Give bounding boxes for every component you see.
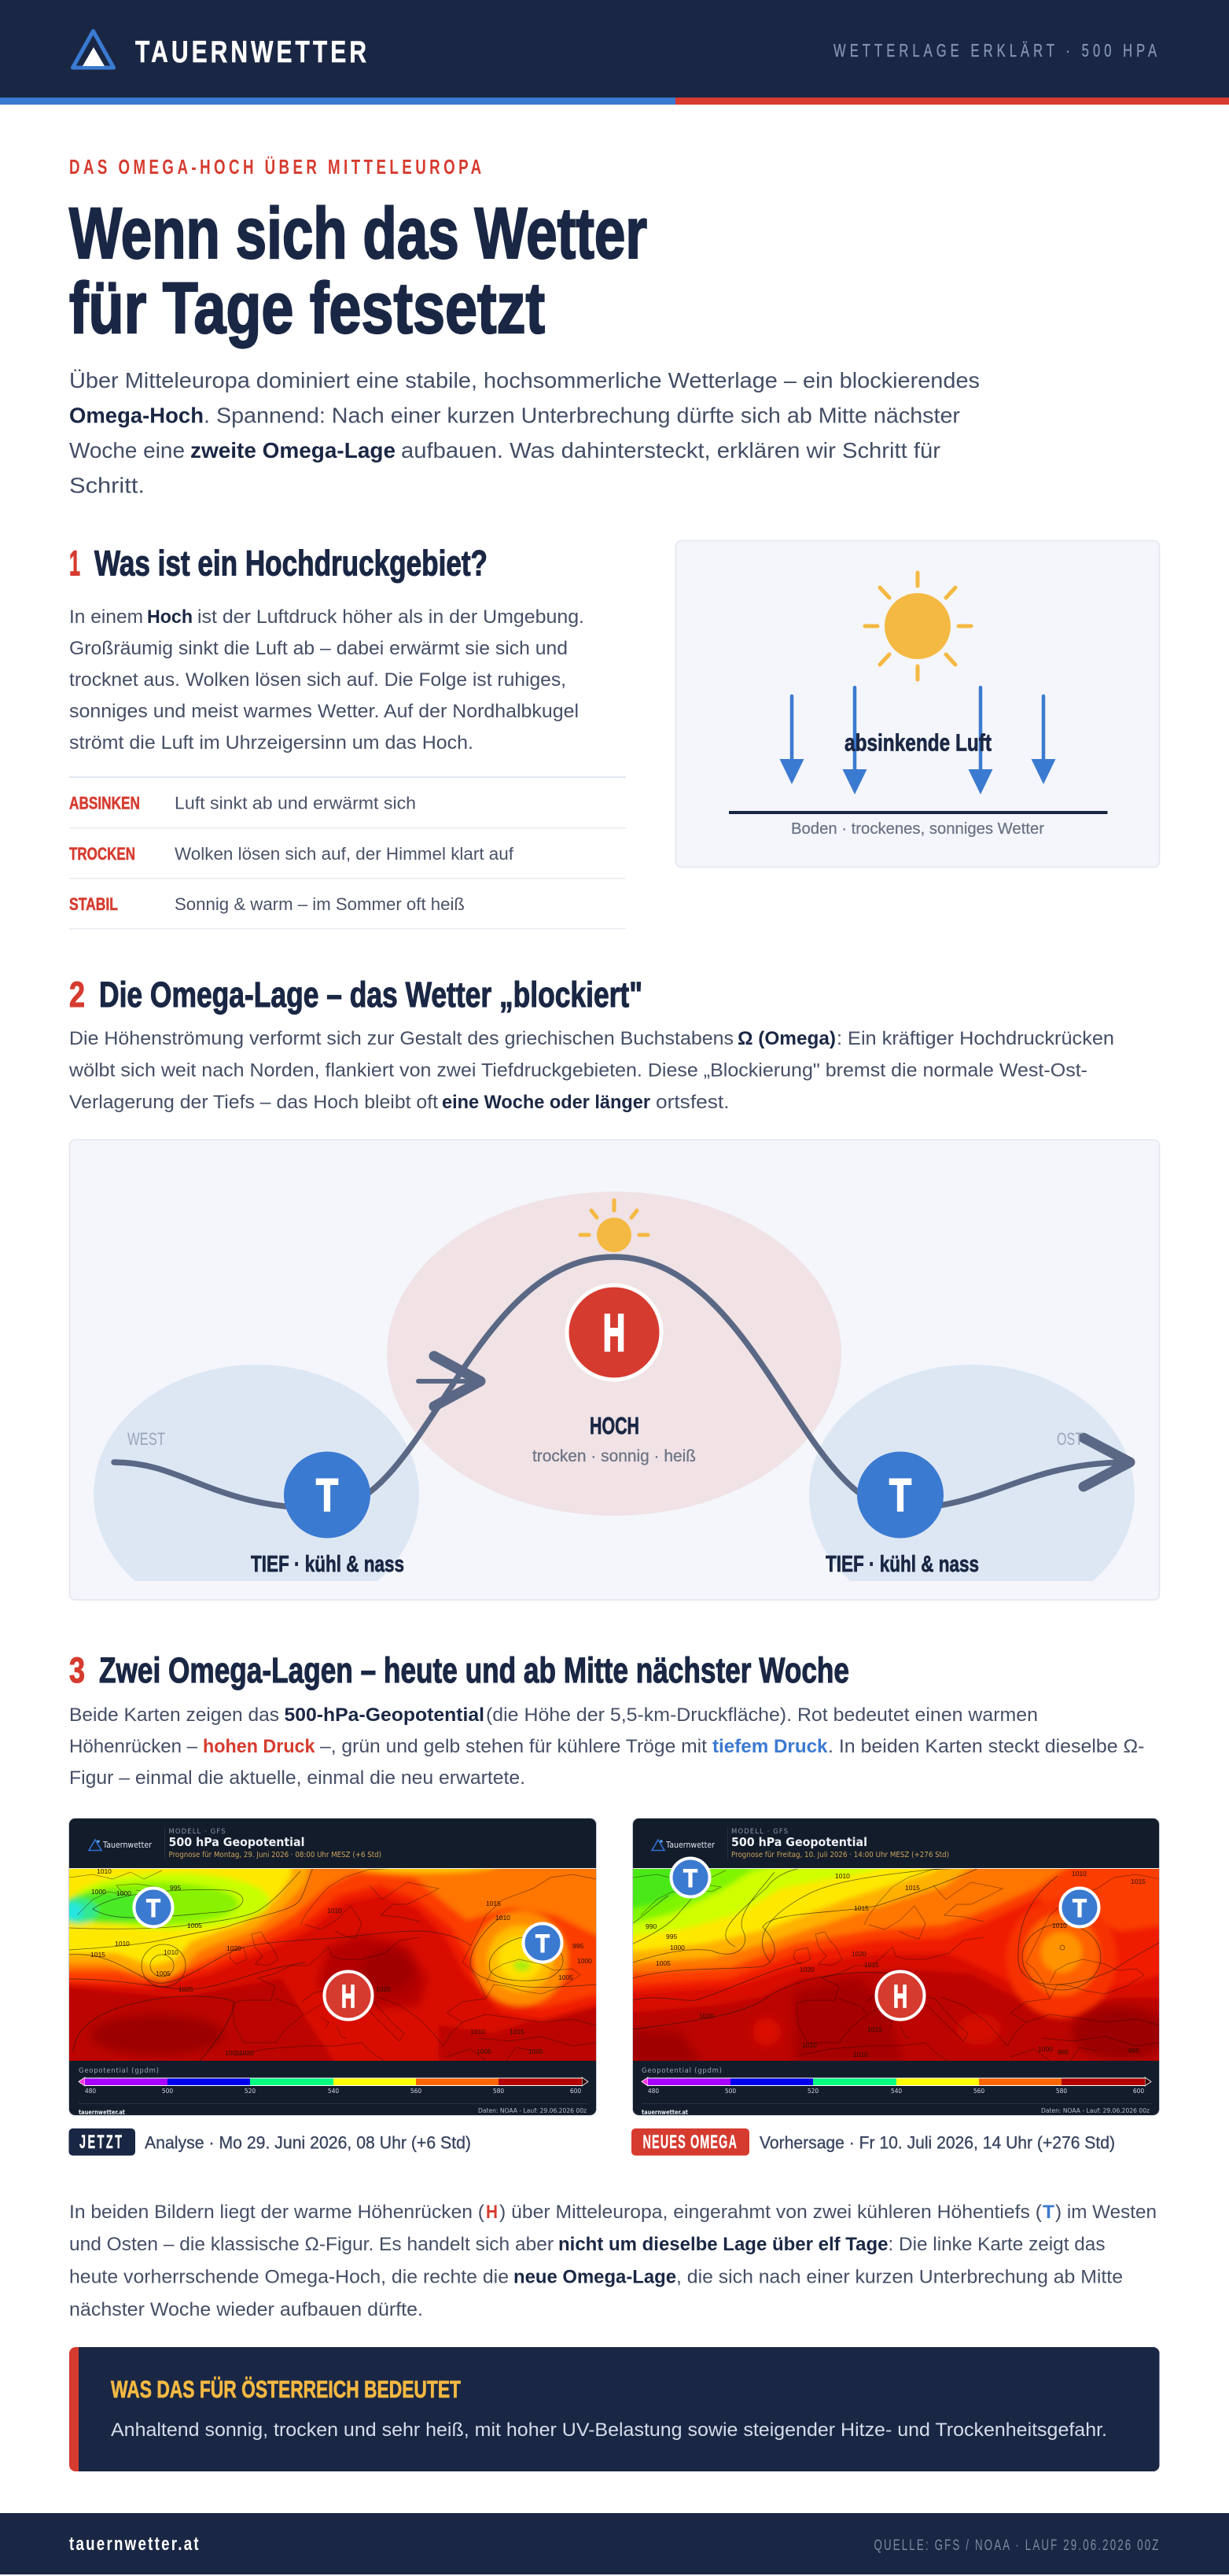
section 3 text: hohen Druck [203, 1736, 315, 1757]
heat map: 1010 [853, 2051, 868, 2058]
map pressure markers: T [683, 1864, 697, 1892]
icon: mountain logo [72, 31, 113, 68]
map legend [642, 2067, 1151, 2116]
heat map: 1000 [1038, 2045, 1053, 2053]
map legend: 560 [973, 2088, 984, 2095]
section 3 text: tiefem Druck [712, 1736, 828, 1757]
map legend: 540 [891, 2088, 902, 2095]
row: stabil: STABIL [69, 894, 118, 914]
heat map: 1005 [156, 1970, 171, 1977]
high marker [567, 1285, 661, 1380]
label: west: WEST [127, 1429, 165, 1449]
heat map: 1000 [116, 1889, 131, 1897]
row: absinken [69, 793, 416, 813]
map legend: 600 [570, 2088, 581, 2095]
map legend: 600 [1133, 2088, 1144, 2095]
brand name: TAUERNWETTER [135, 36, 366, 69]
heat map: 1015 [510, 2028, 524, 2036]
section 2 text: Verlagerung der Tiefs – das Hoch bleibt oft [69, 1092, 438, 1113]
heat map: 1010 [835, 1872, 850, 1880]
intro text: Woche eine [69, 438, 185, 463]
section 3 text: (die Höhe der 5,5-km-Druckfläche). Rot bedeutet einen warmen [486, 1704, 1038, 1726]
map title: 500 hPa Geopotential [731, 1835, 867, 1849]
section 1 text: Großräumig sinkt die Luft ab – dabei erwärmt sie sich und [69, 638, 568, 659]
map legend: 480 [648, 2088, 659, 2095]
section 2 text: eine Woche oder länger [442, 1092, 650, 1113]
arrows: sinking air [780, 687, 1055, 794]
title: für Tage festsetzt [69, 268, 545, 348]
section 1 text: ist der Luftdruck höher als in der Umgebung. [197, 606, 584, 628]
heat map: 1020 [800, 1966, 815, 1973]
map pressure markers: H [341, 1978, 355, 2014]
panel: subsiding air diagram [676, 541, 1159, 867]
map card: new omega [617, 1819, 1176, 2116]
heat map: 1005 [558, 1973, 573, 1981]
ground line [729, 811, 1107, 814]
map logo: Tauernwetter [102, 1841, 153, 1850]
title: Wenn sich das Wetter [69, 193, 647, 274]
heat map: 1015 [486, 1900, 501, 1907]
callout: österreich [69, 2347, 1159, 2471]
closing text: T [1043, 2202, 1054, 2223]
section 2 text: : Ein kräftiger Hochdruckrücken [837, 1028, 1114, 1049]
heat map: 1005 [187, 1922, 202, 1929]
map legend: Daten: NOAA - Lauf: 29.06.2026 00z [1041, 2107, 1150, 2114]
heat map: 1015 [864, 1961, 879, 1969]
heat map: 1005 [656, 1959, 671, 1967]
section 2 heading: 2 [69, 975, 85, 1015]
heat map: 995 [1058, 2048, 1069, 2056]
section 3 heading: 3 [69, 1650, 85, 1690]
map logo: Tauernwetter [665, 1841, 716, 1850]
intro text: Schritt. [69, 474, 145, 497]
heat map: 1025 [178, 1985, 193, 1993]
closing text: In beiden Bildern liegt der warme Höhenrücken ( [69, 2202, 485, 2223]
heat map: 1010 [1072, 1870, 1087, 1878]
heat map: 1020 [226, 1944, 241, 1952]
closing text: nächster Woche wieder aufbauen dürfte. [69, 2299, 423, 2320]
map caption: jetzt: Analyse · Mo 29. Juni 2026, 08 Uhr (+6 Std) [145, 2133, 471, 2152]
heat map: 1015 [1131, 1878, 1146, 1885]
map caption: jetzt [69, 2128, 471, 2155]
label: tief east: TIEF · kühl & nass [826, 1552, 979, 1577]
row: absinken: ABSINKEN [69, 793, 140, 813]
heat map: 995 [572, 1942, 583, 1950]
map legend: Geopotential (gpdm) [642, 2067, 722, 2075]
map pressure markers [134, 1888, 561, 2020]
map pressure markers [672, 1858, 1099, 2020]
low marker east [857, 1452, 944, 1539]
heat map: 1005 [528, 2047, 543, 2055]
closing text: ) im Westen [1055, 2202, 1157, 2223]
map caption: neues omega: NEUES OMEGA [643, 2132, 737, 2153]
heat map: 1000 [577, 1957, 592, 1965]
closing text: nicht um dieselbe Lage über elf Tage [558, 2234, 889, 2255]
section 2 text: Ω (Omega) [738, 1028, 836, 1049]
heat map: 1000 [670, 1944, 685, 1951]
map legend: 480 [85, 2088, 96, 2095]
section 1 text [69, 606, 584, 754]
heat map [633, 1869, 1159, 2061]
map date: Prognose für Montag, 29. Juni 2026 · 08:00 Uhr MESZ (+6 Std) [168, 1851, 381, 1859]
map legend [79, 2067, 588, 2116]
icon: sun [865, 573, 971, 680]
heat map: 1010 [115, 1940, 130, 1948]
section 2 text: wölbt sich weit nach Norden, flankiert von zwei Tiefdruckgebieten. Diese „Blockierung" bremst die normale West-Ost- [68, 1060, 1087, 1081]
section 1 text: In einem [69, 606, 143, 628]
map legend: tauernwetter.at [642, 2109, 688, 2116]
intro text: . Spannend: Nach einer kurzen Unterbrechung dürfte sich ab Mitte nächster [204, 403, 960, 428]
map caption: neues omega: Vorhersage · Fr 10. Juli 2026, 14 Uhr (+276 Std) [760, 2133, 1115, 2152]
eyebrow: DAS OMEGA-HOCH ÜBER MITTELEUROPA [69, 155, 481, 179]
footer [0, 2513, 1229, 2574]
low marker east: T [889, 1470, 911, 1521]
map model label: MODELL · GFS [731, 1828, 788, 1836]
intro text: Über Mitteleuropa dominiert eine stabile, hochsommerliche Wetterlage – ein blockierendes [69, 368, 980, 392]
arrow: flow on the ridge [418, 1356, 480, 1406]
intro text [69, 368, 980, 497]
closing text: heute vorherrschende Omega-Hoch, die rechte die [69, 2267, 509, 2287]
closing text: , die sich nach einer kurzen Unterbrechung ab Mitte [676, 2267, 1123, 2287]
low pressure area east [809, 1365, 1135, 1581]
map legend: Geopotential (gpdm) [79, 2067, 159, 2075]
map date: Prognose für Freitag, 10. Juli 2026 · 14:00 Uhr MESZ (+276 Std) [731, 1851, 949, 1859]
map legend: 500 [162, 2088, 173, 2095]
map logo [89, 1840, 153, 1850]
heat map: 1000 [91, 1888, 106, 1896]
heat map: 1005 [477, 2047, 491, 2055]
map legend: 520 [245, 2088, 256, 2095]
section 1 text: Hoch [147, 606, 193, 628]
heat map: 1015 [867, 2025, 882, 2033]
heat map: 1020 [699, 2012, 714, 2020]
map pressure markers: T [1073, 1894, 1087, 1922]
low marker west: T [316, 1470, 338, 1521]
map legend: 580 [1056, 2088, 1067, 2095]
map logo [652, 1840, 716, 1850]
footer site: tauernwetter.at [69, 2534, 199, 2555]
heat map: 1010 [470, 2028, 485, 2036]
map pressure markers: T [535, 1929, 550, 1958]
section 1 text: trocknet aus. Wolken lösen sich auf. Die Folge ist ruhiges, [69, 669, 566, 691]
section 3 text: Figur – einmal die aktuelle, einmal die neu erwartete. [69, 1767, 525, 1789]
key facts table [69, 776, 626, 930]
high marker: H [603, 1303, 625, 1362]
heat map: 990 [646, 1922, 657, 1930]
map legend: tauernwetter.at [79, 2109, 125, 2116]
heat map: 1015 [854, 1904, 869, 1912]
section 3 text: Beide Karten zeigen das [69, 1704, 279, 1726]
map caption: neues omega [631, 2128, 1115, 2155]
title [69, 193, 647, 348]
row: trocken: Wolken lösen sich auf, der Himmel klart auf [175, 844, 514, 864]
closing text [69, 2202, 1157, 2320]
icon: sun [580, 1200, 648, 1252]
map legend: Daten: NOAA - Lauf: 29.06.2026 00z [478, 2107, 587, 2114]
label: tief west: TIEF · kühl & nass [251, 1552, 404, 1577]
map pressure markers: T [146, 1894, 160, 1922]
section 1 heading: 1 [69, 543, 80, 584]
low marker west [284, 1452, 370, 1539]
low pressure area west [94, 1365, 419, 1581]
section 3 text: Höhenrücken – [69, 1736, 197, 1757]
section 1 text: sonniges und meist warmes Wetter. Auf der Nordhalbkugel [69, 701, 579, 722]
row: trocken: TROCKEN [69, 844, 135, 864]
footer source: QUELLE: GFS / NOAA · LAUF 29.06.2026 00Z [874, 2537, 1158, 2554]
section 3 text: –, grün und gelb stehen für kühlere Tröge mit [320, 1736, 707, 1757]
heat map: 1020 [376, 1985, 391, 1993]
panel: omega diagram [69, 1140, 1159, 1624]
heat map: 1015 [905, 1884, 920, 1892]
map legend: 560 [410, 2088, 421, 2095]
map legend: 500 [725, 2088, 736, 2095]
intro text: Omega-Hoch [69, 403, 204, 428]
callout heading: WAS DAS FÜR ÖSTERREICH BEDEUTET [111, 2375, 461, 2403]
label: high properties: trocken · sonnig · heiß [532, 1447, 696, 1465]
heat map: 995 [1128, 2047, 1139, 2055]
map legend: 540 [328, 2088, 339, 2095]
heat map: 1010 [1052, 1922, 1067, 1929]
section 2 text: Die Höhenströmung verformt sich zur Gestalt des griechischen Buchstabens [69, 1028, 734, 1049]
section 3 text: 500-hPa-Geopotential [285, 1704, 484, 1726]
heat map: 1005 [225, 2049, 240, 2057]
section 3 text [69, 1704, 1145, 1789]
heat map: 1010 [802, 2041, 817, 2049]
heat map: 1010 [495, 1914, 510, 1922]
heat map: 995 [666, 1933, 677, 1940]
closing text: neue Omega-Lage [513, 2267, 676, 2287]
map caption: jetzt: JETZT [79, 2132, 122, 2153]
intro text: zweite Omega-Lage [190, 438, 396, 463]
heat map: 1010 [97, 1867, 112, 1875]
map card: current omega [53, 1819, 612, 2116]
map legend: 520 [808, 2088, 819, 2095]
label: ost: OST [1057, 1429, 1083, 1449]
callout body: Anhaltend sonnig, trocken und sehr heiß, mit hoher UV-Belastung sowie steigender Hitze- und Trockenheitsgefahr. [111, 2419, 1107, 2441]
arrow: flow east [1084, 1438, 1130, 1487]
label: hoch: HOCH [590, 1412, 639, 1439]
section 3 heading: Zwei Omega-Lagen – heute und ab Mitte nächster Woche [99, 1650, 849, 1690]
label: absinkende Luft: absinkende Luft [844, 728, 992, 757]
closing text: ) über Mitteleuropa, eingerahmt von zwei kühleren Höhentiefs ( [499, 2202, 1043, 2223]
high pressure area [387, 1192, 841, 1516]
intro text: aufbauen. Was dahintersteckt, erklären wir Schritt für [401, 438, 940, 463]
closing text: H [486, 2202, 498, 2223]
map pressure markers: H [893, 1978, 907, 2014]
omega jet stream curve [114, 1257, 1130, 1509]
row: stabil: Sonnig & warm – im Sommer oft heiß [175, 894, 465, 914]
map legend: 580 [493, 2088, 504, 2095]
section 2 text: ortsfest. [656, 1092, 730, 1113]
closing text: : Die linke Karte zeigt das [889, 2234, 1106, 2255]
section 2 heading: Die Omega-Lage – das Wetter „blockiert" [99, 975, 642, 1015]
heat map: 995 [170, 1884, 181, 1892]
map title: 500 hPa Geopotential [168, 1835, 305, 1849]
section 1 heading: Was ist ein Hochdruckgebiet? [94, 543, 488, 584]
header bar [0, 0, 1229, 105]
heat map [69, 1869, 596, 2061]
section 2 text [68, 1028, 1114, 1113]
heat map: 1020 [239, 2049, 254, 2057]
heat map: 1020 [852, 1950, 867, 1958]
closing text: und Osten – die klassische Ω-Figur. Es handelt sich aber [69, 2234, 554, 2255]
heat map: 1015 [90, 1951, 105, 1959]
ground caption: Boden · trockenes, sonniges Wetter [791, 820, 1044, 838]
heat map: 1010 [164, 1948, 178, 1956]
row: absinken: Luft sinkt ab und erwärmt sich [175, 793, 416, 813]
section 1 text: strömt die Luft im Uhrzeigersinn um das Hoch. [69, 732, 473, 754]
section 3 text: . In beiden Karten steckt dieselbe Ω- [828, 1736, 1145, 1757]
map model label: MODELL · GFS [168, 1828, 225, 1836]
heat map: 1010 [327, 1907, 342, 1914]
header tagline: WETTERLAGE ERKLÄRT · 500 HPA [833, 41, 1157, 61]
